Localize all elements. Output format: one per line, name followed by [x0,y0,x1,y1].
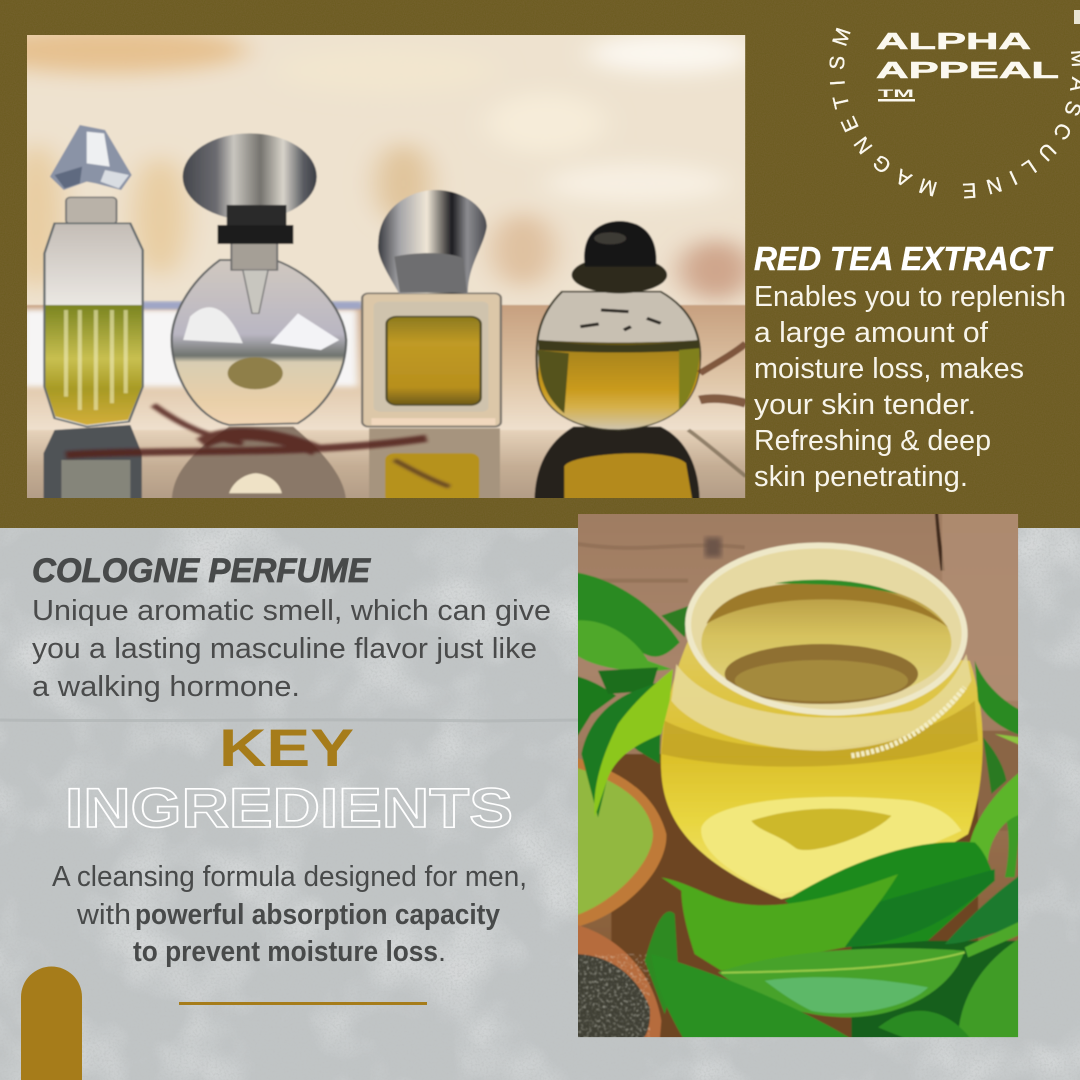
text block: cologne description [32,595,551,703]
text block: cologne description: a walking hormone. [32,671,300,703]
wooden table [575,511,1021,1041]
text block: formula description: with [76,899,131,931]
dried saffron stem shadow [66,405,449,487]
text block: red tea description [754,281,1066,493]
glass jar of tea [661,538,983,899]
text block: formula description: powerful absorption capacity [135,899,500,931]
text block: red tea description: skin penetrating. [754,461,968,493]
text block: red tea description: your skin tender. [754,389,976,421]
title: key: KEY [219,719,354,778]
bottle 2 [172,133,346,425]
dried tea bowl [575,924,661,1041]
photo background [0,27,753,503]
heading: red tea extract: RED TEA EXTRACT [754,240,1054,277]
right side leaves [968,661,1021,877]
text block: red tea description: Enables you to replenish [754,281,1066,313]
text block: cologne description: you a lasting masculine flavor just like [32,633,537,665]
bottle 1 [44,125,143,427]
wordmark ALPHA: ALPHA [876,28,1031,54]
dried leaf at right edge [688,343,746,477]
gold pill decoration [21,966,82,1080]
background tea leaves on the left [575,572,690,817]
heading: cologne perfume: COLOGNE PERFUME [32,552,371,590]
text block: formula description: to prevent moisture loss [133,936,438,968]
text block: formula description [52,861,527,968]
brown background panel [0,0,1080,528]
tea photograph [575,511,1021,1041]
reflections of bottles [44,425,700,503]
bright lime leaf over jar [594,669,673,817]
title: ingredients outline: INGREDIENTS [65,776,513,839]
gold divider line [179,1002,427,1005]
text block: red tea description: Refreshing & deep [754,425,991,457]
grey concrete background panel [0,528,1080,1080]
bottle 3 [362,190,501,427]
large foreground leaves [645,842,1021,1041]
perfume photograph [0,27,753,503]
text block: formula description: . [438,936,446,968]
wordmark APPEAL: APPEAL [876,57,1059,83]
text block: red tea description: a large amount of [754,317,989,349]
trademark mark: TM [878,88,914,100]
trademark mark [878,88,915,102]
matcha bowl [575,757,666,927]
text block: cologne description: Unique aromatic smell, which can give [32,595,551,627]
text block: formula description: A cleansing formula designed for men, [52,861,527,893]
bottle 4 [536,221,700,430]
text block: red tea description: moisture loss, makes [754,353,1024,385]
